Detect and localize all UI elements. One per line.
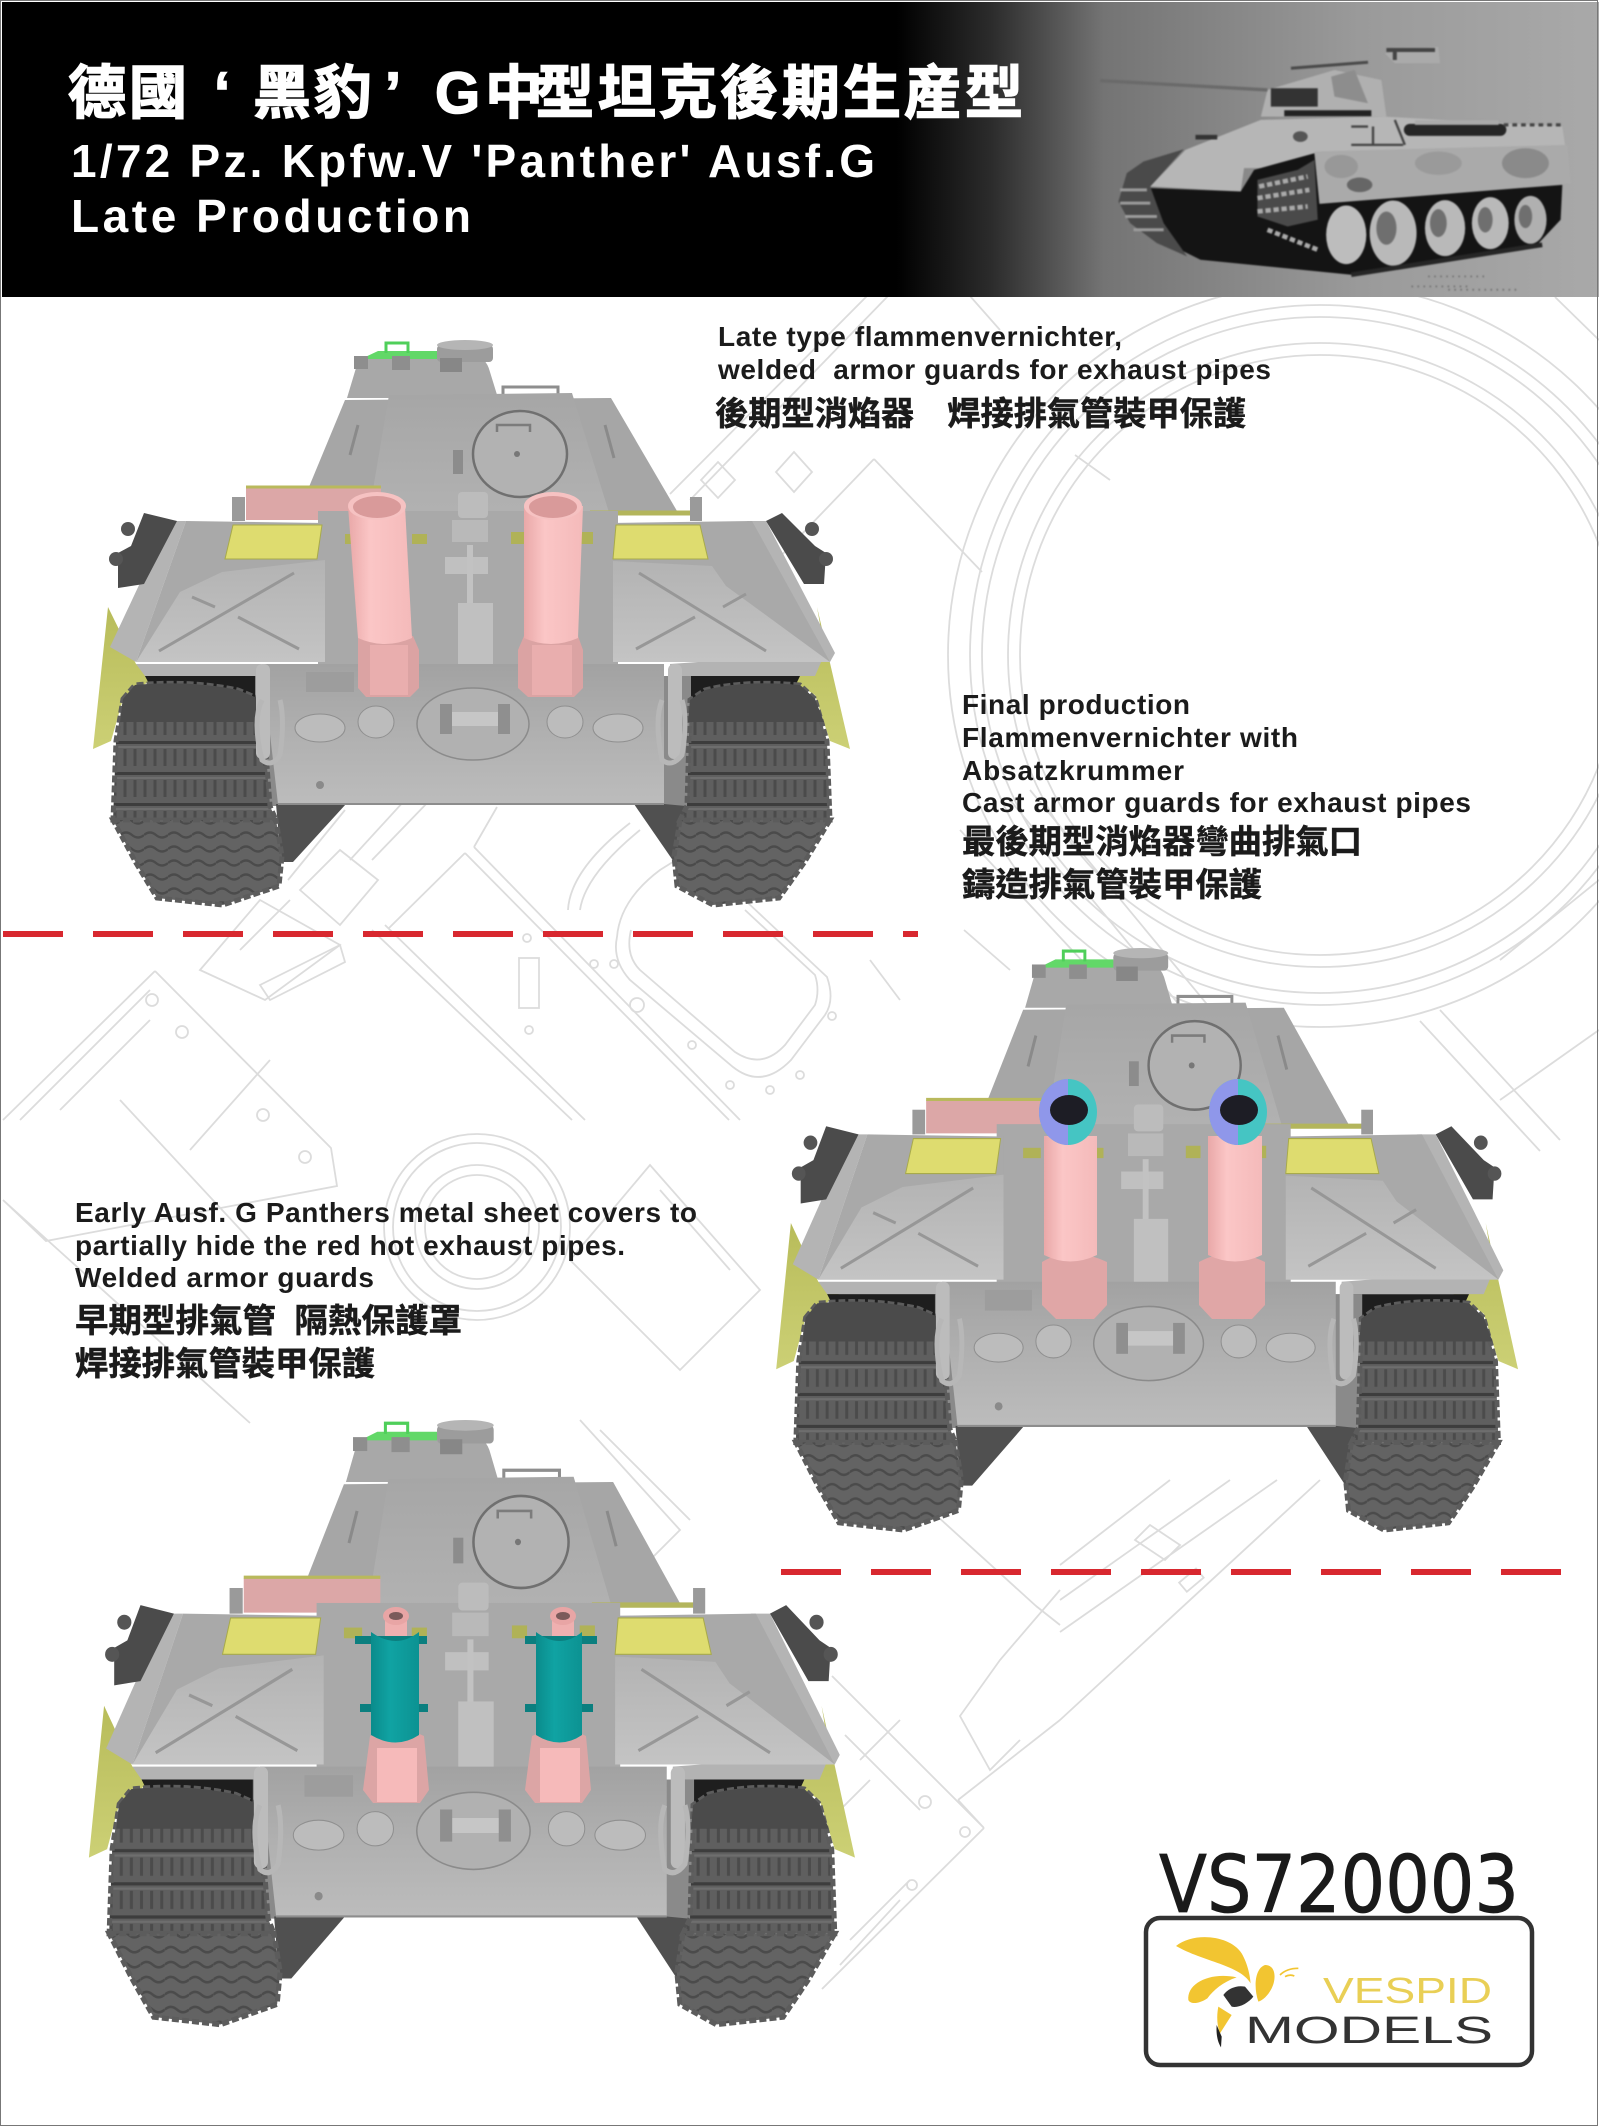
right covered exhaust <box>525 1607 597 1803</box>
English title line 2: Late Production <box>71 190 471 242</box>
caption: early Ausf. G: 焊接排氣管裝甲保護 <box>75 1345 375 1382</box>
caption: final production: Cast armor guards for exhaust pipes <box>962 787 1471 818</box>
left exhaust pipe <box>348 492 419 697</box>
caption: early Ausf. G: Early Ausf. G Panthers metal sheet covers to <box>75 1197 697 1228</box>
caption: final production: 最後期型消焰器彎曲排氣口 <box>962 823 1362 860</box>
hull render <box>89 1420 855 2025</box>
caption: early Ausf. G: partially hide the red hot exhaust pipes. <box>75 1230 625 1261</box>
icon: vespid wasp <box>1176 1937 1298 2047</box>
logo wordmark MODELS: MODELS <box>1245 2010 1493 2052</box>
caption: final production: Flammenvernichter with <box>962 722 1298 753</box>
caption: final production <box>962 689 1471 903</box>
caption: final production: Absatzkrummer <box>962 755 1184 786</box>
tank 2: final production <box>776 948 1518 1530</box>
logo box <box>1146 1918 1532 2065</box>
caption: late type: welded armor guards for exhaust pipes <box>717 354 1271 385</box>
header banner <box>2 2 1599 297</box>
tank 3: early Ausf. G <box>89 1420 855 2025</box>
caption: late type: Late type flammenvernichter, <box>718 321 1122 352</box>
red dashed divider 1 <box>3 931 918 937</box>
Chinese title: 德國‘黑豹’G中型坦克後期生産型 <box>68 61 1023 126</box>
hull render <box>776 948 1518 1530</box>
English title line 1: 1/72 Pz. Kpfw.V 'Panther' Ausf.G <box>71 135 875 187</box>
caption: early Ausf. G: Welded armor guards <box>75 1262 374 1293</box>
banner gradient background <box>2 2 1599 297</box>
logo border <box>1146 1918 1532 2065</box>
hull render <box>93 340 850 905</box>
left covered exhaust <box>355 1607 429 1803</box>
caption: late type: 後期型消焰器 焊接排氣管裝甲保護 <box>715 395 1246 432</box>
product code: VS720003 <box>1159 1839 1519 1931</box>
caption: early Ausf. G <box>75 1197 697 1382</box>
caption: early Ausf. G: 早期型排氣管 隔熱保護罩 <box>75 1302 462 1339</box>
right exhaust pipe <box>518 492 583 697</box>
right exhaust with elbow <box>1199 1079 1267 1319</box>
red dashed divider 2 <box>781 1569 1561 1575</box>
caption: late type <box>715 321 1271 432</box>
left exhaust with elbow <box>1039 1079 1107 1319</box>
caption: final production: Final production <box>962 689 1190 720</box>
tank 1: late type flammenvernichter <box>93 340 850 905</box>
photo of Panther tank <box>1100 47 1571 290</box>
caption: final production: 鑄造排氣管裝甲保護 <box>962 866 1262 903</box>
logo wordmark VESPID: VESPID <box>1323 1970 1492 2011</box>
